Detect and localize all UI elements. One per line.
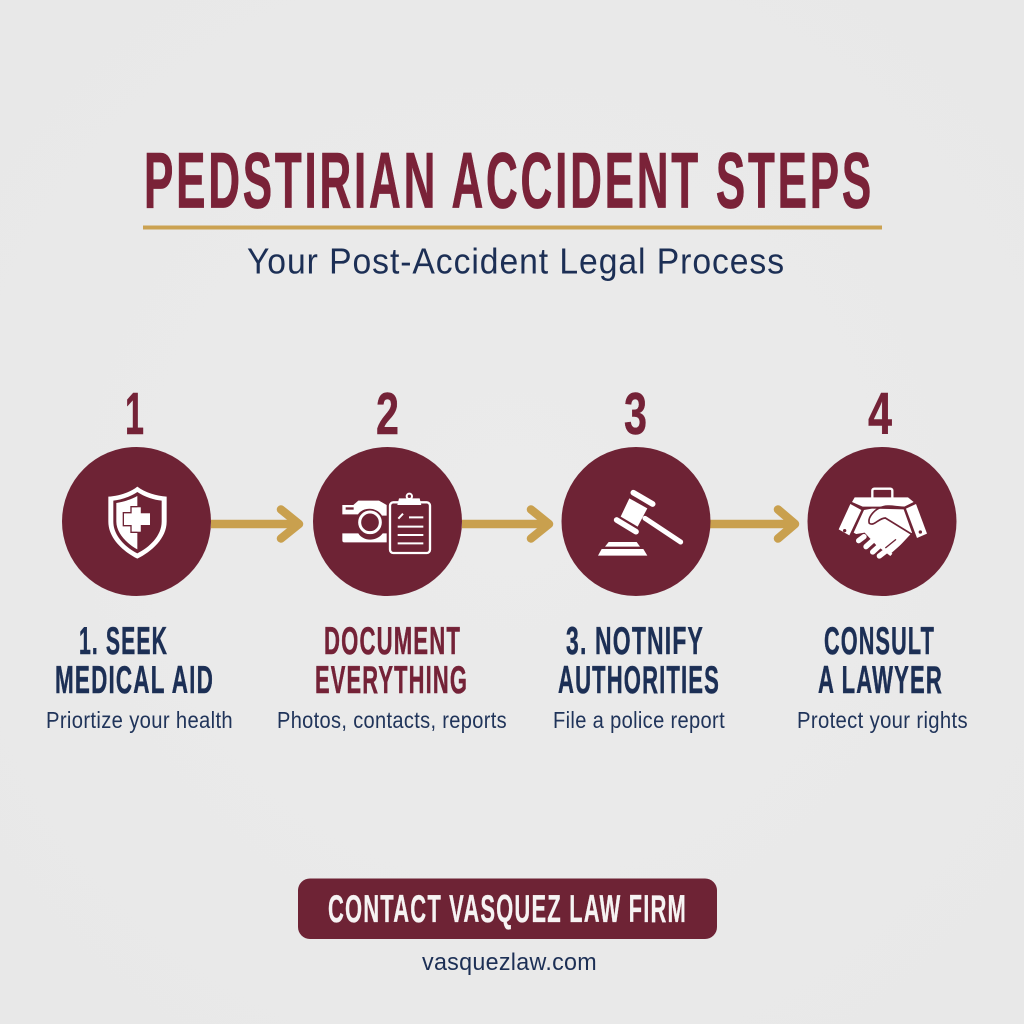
step 4 xyxy=(797,381,968,733)
step 4 number: 4 xyxy=(868,381,892,447)
arrow: step 1 to 2 xyxy=(211,510,299,538)
step 1 heading: MEDICAL AID xyxy=(55,659,214,702)
arrow: step 3 to 4 xyxy=(710,510,795,538)
step 1 circle xyxy=(62,447,211,596)
step 1 number: 1 xyxy=(125,381,144,447)
step 3 heading: AUTHORITIES xyxy=(558,659,720,702)
gold title rule xyxy=(143,226,882,230)
website: vasquezlaw.com xyxy=(422,949,597,976)
call-to-action button: CONTACT VASQUEZ LAW FIRM xyxy=(328,888,687,931)
icon: camera and clipboard xyxy=(342,494,430,553)
step 3 number: 3 xyxy=(624,381,647,447)
step 2 xyxy=(277,381,507,733)
step 2 heading: DOCUMENT xyxy=(324,620,461,663)
step 2 number: 2 xyxy=(376,381,399,447)
step 3 circle xyxy=(562,447,710,596)
step 4 description: Protect your rights xyxy=(797,707,968,733)
step 2 circle xyxy=(313,447,462,596)
icon: medical shield xyxy=(108,487,167,559)
step 1 description: Priortize your health xyxy=(46,707,233,733)
step 3 heading xyxy=(558,620,720,702)
step 2 description: Photos, contacts, reports xyxy=(277,707,507,733)
step 1 heading: 1. SEEK xyxy=(79,620,168,663)
step 4 heading xyxy=(818,620,943,702)
step 4 heading: CONSULT xyxy=(824,620,935,663)
icon: gavel xyxy=(598,493,681,556)
step 3 xyxy=(553,381,725,733)
icon: briefcase handshake xyxy=(839,489,927,561)
arrow: step 2 to 3 xyxy=(462,510,549,538)
step 1 xyxy=(46,381,233,733)
step 2 heading xyxy=(315,620,468,702)
step 4 circle xyxy=(808,447,956,596)
step 3 heading: 3. NOTNIFY xyxy=(566,620,704,663)
subtitle: Your Post-Accident Legal Process xyxy=(247,240,785,282)
step 3 description: File a police report xyxy=(553,707,725,733)
call-to-action button xyxy=(298,878,717,939)
step 1 heading xyxy=(55,620,214,702)
step 2 heading: EVERYTHING xyxy=(315,659,468,702)
